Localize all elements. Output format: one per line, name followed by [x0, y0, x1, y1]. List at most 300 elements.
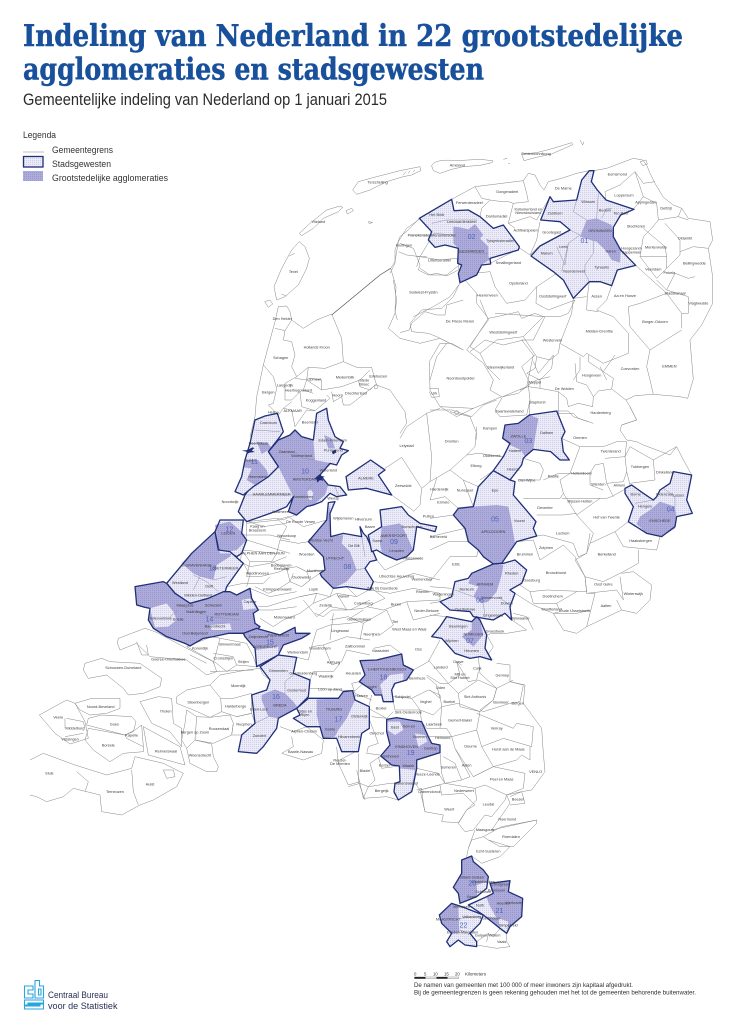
municipality labels: Vlieland	[312, 220, 325, 224]
region: stadsgewest 05 Apeldoorn: 05	[491, 517, 499, 524]
municipality labels: Alphen-Chaam	[291, 730, 317, 734]
municipality labels: Barendrecht	[205, 624, 226, 628]
municipality labels: Ooststellingwerf	[539, 295, 567, 299]
title	[23, 18, 683, 86]
municipality labels: Lingewaal	[331, 629, 349, 633]
municipality labels: Sint Anthonis	[464, 695, 486, 699]
municipality labels: Capelle	[244, 600, 256, 604]
municipality labels: Aalsmeer	[272, 510, 289, 514]
municipality labels: Hulst	[146, 783, 155, 787]
municipality labels: Assen	[591, 295, 602, 299]
municipality labels: Goes	[110, 723, 119, 727]
municipality labels: Weert	[444, 808, 455, 812]
municipality labels: Onderbanken	[472, 880, 495, 884]
municipality labels: Hilvarenbeek	[338, 735, 360, 739]
municipality labels: Valkenburg	[462, 915, 481, 919]
municipality labels: ARNHEM	[477, 582, 493, 586]
municipality labels: Nieuwkoop	[277, 534, 296, 538]
municipality labels: Gulpen-Wittem	[475, 933, 500, 937]
region: stadsgewest 08 Utrecht: 08	[343, 564, 351, 571]
municipality labels: Papendrecht	[267, 633, 290, 637]
municipality labels: Nieuwkruisland	[515, 211, 541, 215]
municipality labels: EDE	[452, 562, 460, 566]
municipality labels: Gemert-Bakel	[448, 718, 472, 722]
municipality labels: GRONINGEN	[588, 229, 612, 233]
municipality labels: Stadskanaal	[664, 291, 686, 295]
municipality labels: Geertruidenberg	[289, 672, 317, 676]
municipality labels: Steenwijkerland	[487, 366, 514, 370]
municipality labels: Veldhoven	[381, 754, 399, 758]
municipality labels: Veenendaal	[412, 578, 432, 582]
municipality labels: Boxmeer	[493, 700, 509, 704]
municipality labels: LEIDEN	[221, 532, 235, 536]
municipality labels: Zuidhorn	[547, 211, 563, 215]
region: stadsgewest 07 Nijmegen	[432, 617, 492, 660]
municipality labels: Waddinxveen	[246, 572, 269, 576]
municipality labels: Opsterland	[509, 282, 528, 286]
municipality labels: Heusden	[346, 672, 361, 676]
logo text: voor de Statistiek	[48, 1001, 118, 1012]
municipality labels: Vianen	[337, 594, 349, 598]
region: stadsgewest 02 Leeuwarden	[419, 199, 519, 283]
municipality labels: Marum	[541, 252, 553, 256]
municipality labels: Brielle	[173, 618, 184, 622]
municipality labels: Woerden	[299, 552, 314, 556]
municipality labels: Bergen	[511, 702, 524, 706]
municipality labels: Beesel	[512, 798, 524, 802]
municipality labels: Harderwijk	[430, 487, 448, 491]
municipality labels: De Wolden	[555, 387, 574, 391]
municipality labels: Bergeijk	[375, 789, 389, 793]
municipality labels: Twenterand	[601, 449, 621, 453]
title: agglomeraties en stadsgewesten	[23, 52, 484, 86]
municipality labels: AMERSFOORT	[381, 534, 408, 538]
municipality labels: Barneveld	[430, 535, 447, 539]
municipality labels: Simpelveld	[499, 923, 518, 927]
footnote: De namen van gemeenten met 100 000 of meer inwoners zijn kapitaal afgedrukt.	[414, 982, 633, 989]
municipality labels: Roermond	[498, 818, 516, 822]
municipality labels: Urk	[431, 392, 437, 396]
region: stadsgewest 15 Dordrecht	[243, 627, 310, 667]
region: stadsgewest 19 Eindhoven: 19	[407, 750, 415, 757]
municipality labels: Schinnen	[475, 890, 491, 894]
municipality labels: Veghel	[420, 700, 432, 704]
municipality labels: Helmond	[435, 736, 450, 740]
municipality labels: ROTTERDAM	[215, 613, 239, 617]
municipality labels: Rijnwaarde	[510, 617, 530, 621]
municipality labels: Hengelo	[638, 504, 652, 508]
municipality labels: Vaals	[497, 940, 506, 944]
municipality labels: Vught	[367, 685, 378, 689]
municipality labels: Lingewaard	[483, 613, 503, 617]
municipality labels: Roosendaal	[209, 727, 229, 731]
municipality labels: Vlissingen	[61, 738, 79, 742]
municipality labels: Meerssen	[453, 905, 470, 909]
municipality labels: AMSTERDAM	[293, 478, 317, 482]
municipality labels: Eijsden-Margraten	[447, 930, 478, 934]
region: stadsgewest 22 Maastricht: 22	[459, 922, 467, 929]
municipality labels: Midden-Drenthe	[586, 330, 613, 334]
municipality labels: Wormerland	[291, 454, 312, 458]
municipality labels: Winterswijk	[624, 592, 643, 596]
municipality labels: Moerdijk	[231, 684, 246, 688]
municipality labels: Roerdalen	[502, 835, 520, 839]
municipality labels: Zeewolde	[395, 484, 412, 488]
municipality labels: Zwijndrecht	[249, 635, 269, 639]
municipality labels: Delfzijl	[660, 207, 672, 211]
municipality labels: Heerenveen	[477, 294, 498, 298]
municipality labels: Tytsjerksteradiel	[486, 239, 514, 243]
municipality labels: Someren	[441, 765, 456, 769]
municipality labels: Valkenswaard	[394, 782, 418, 786]
municipality labels: Etten-Leur	[250, 708, 269, 712]
municipality labels: Hellendoorn	[571, 472, 592, 476]
municipality labels: Oost Gelre	[594, 583, 613, 587]
municipality labels: Westerveld	[543, 338, 562, 342]
municipality labels: Nederweert	[454, 789, 475, 793]
region: stadsgewest 11 Haarlem: 11	[251, 459, 258, 466]
municipality labels: Aalten	[601, 604, 611, 608]
municipality labels: Deurne	[464, 744, 477, 748]
municipality labels: Castricum	[260, 421, 277, 425]
scale bar: 15	[444, 972, 449, 976]
municipality labels: Reeuwijk	[274, 567, 290, 571]
municipality labels: Wijk bij Duurstede	[367, 587, 398, 591]
municipality labels: De Ronde Venen	[286, 520, 315, 524]
municipality labels: Rheden	[505, 572, 518, 576]
municipality labels: Reusel-	[333, 758, 347, 762]
municipality labels: Bladel	[360, 769, 370, 773]
municipality labels: Oss	[415, 648, 422, 652]
municipality labels: Utrechtse Heuvelrug	[379, 574, 414, 578]
region: stadsgewest 20 Sittard-Geleen: 20	[468, 881, 476, 888]
municipality labels: Lelystad	[400, 444, 414, 448]
municipality labels: Zaanstad	[279, 450, 295, 454]
municipality labels: Almelo	[613, 484, 625, 488]
municipality labels: Deventer	[537, 506, 553, 510]
municipality labels: Borger-Odoorn	[642, 320, 668, 324]
region: stadsgewest 02 Leeuwarden: 02	[468, 234, 476, 241]
municipality labels: Hoogeveen	[582, 373, 601, 377]
municipality labels: Heerde	[507, 467, 520, 471]
municipality labels: Menameradiel	[431, 233, 456, 237]
municipality labels: Stede	[359, 378, 369, 382]
municipality labels: Velsen	[244, 458, 256, 462]
municipality labels: Leek	[559, 245, 568, 249]
municipality labels: Oldambt	[678, 237, 693, 241]
municipality labels: Hoorn	[332, 393, 343, 397]
municipality labels: Gilze en	[298, 709, 312, 713]
municipality labels: Geldermalsen	[347, 618, 371, 622]
municipality labels: Steenbergen	[187, 700, 209, 704]
municipality labels: Maasgouw	[476, 828, 494, 832]
municipality labels: Werkendam	[287, 650, 308, 654]
municipality labels: Oisterwijk	[351, 714, 368, 718]
municipality labels: Wijchen	[445, 639, 458, 643]
municipality labels: Bergen op Zoom	[181, 730, 209, 734]
municipality labels: Baarn	[365, 525, 375, 529]
municipality labels: Zaltbommel	[345, 644, 365, 648]
municipality labels: Bodegraven-	[271, 563, 293, 567]
region: stadsgewest 06 Arnhem	[440, 560, 527, 620]
municipality labels: Oud-Beijerland	[182, 632, 208, 636]
municipality labels: ENSCHEDE	[649, 519, 671, 523]
municipality labels: Drechterland	[345, 392, 367, 396]
municipality labels: Sint-Oedenrode	[395, 711, 422, 715]
region: stadsgewest 03 Zwolle: 03	[524, 438, 532, 445]
municipality labels: Smallingerland	[496, 261, 521, 265]
municipality labels: TILBURG	[326, 708, 342, 712]
municipality labels: Zederik	[319, 603, 332, 607]
region: stadsgewest 19 Eindhoven	[381, 718, 440, 800]
municipality labels: Pekela	[663, 271, 676, 275]
region: stadsgewest 13 Den Haag: 13	[209, 566, 217, 573]
municipality labels: Hollands Kroon	[304, 345, 330, 349]
municipality labels: Koggenland	[306, 398, 326, 402]
municipality labels: Hilversum	[355, 518, 372, 522]
municipality labels: Noord-Beveland	[87, 705, 115, 709]
municipality labels: Asten	[462, 763, 472, 767]
municipality labels: Purmerend	[324, 449, 343, 453]
municipality labels	[45, 152, 708, 944]
municipality labels: Ommen	[573, 436, 587, 440]
municipality labels: Bunschoten	[402, 525, 422, 529]
municipality labels: Braassem	[249, 528, 266, 532]
municipality labels: Heiloo	[268, 411, 279, 415]
municipality labels: Kapelle	[125, 734, 138, 738]
municipality labels: Staphorst	[529, 400, 546, 404]
municipality labels: Borne	[631, 492, 641, 496]
region: stadsgewest 13 Den Haag	[167, 532, 243, 603]
municipality labels: Montfoort	[307, 569, 324, 573]
municipality labels: Leeuwarderadeel	[447, 220, 477, 224]
map: municipal boundaries	[30, 140, 713, 948]
municipality labels: Putten	[423, 514, 434, 518]
municipality labels: Gennep	[496, 673, 509, 677]
municipality labels: ALMERE	[358, 477, 374, 481]
municipality labels: De Mierden	[330, 762, 350, 766]
municipality labels: Oldebroek	[483, 454, 501, 458]
region: stadsgewest 01 Groningen	[531, 171, 636, 298]
municipality labels: Berkelland	[598, 552, 616, 556]
municipality labels: Achtkarspelen	[514, 229, 538, 233]
municipality labels: Littenseradiel	[428, 259, 451, 263]
municipality labels: Leudal	[483, 803, 494, 807]
municipality labels: Enkhuizen	[369, 375, 387, 379]
municipality labels: Heemstede	[249, 475, 268, 479]
municipality labels: Eersel	[379, 763, 390, 767]
municipality labels: Medemblik	[336, 375, 354, 379]
municipality labels: Aa en Hunze	[614, 294, 636, 298]
region: stadsgewest 01 Groningen: 01	[580, 238, 588, 245]
municipality labels: Franekeradeel	[408, 234, 432, 238]
municipality labels: Rijen	[301, 713, 309, 717]
municipality labels: Menterwolde	[645, 246, 667, 250]
municipality labels: West Maas en Waal	[392, 628, 426, 632]
municipality labels: ZWOLLE	[510, 434, 527, 438]
municipality labels: Harlingen	[396, 244, 412, 248]
municipality labels: Vlaardingen	[186, 610, 206, 614]
municipality labels: Woensdrecht	[189, 754, 212, 758]
municipality labels: Boekel	[443, 700, 455, 704]
municipality labels: Uden	[436, 686, 445, 690]
municipality labels: EINDHOVEN	[395, 745, 418, 749]
municipality labels: Venray	[491, 727, 503, 731]
municipality labels: Ermelo	[437, 501, 449, 505]
municipality labels: ZOETERMEER	[212, 567, 239, 571]
municipality labels: Waalwijk	[319, 674, 334, 678]
municipality labels: Losser	[673, 493, 685, 497]
municipality labels: Midden-Delfland	[184, 593, 212, 597]
municipality labels: Beemster	[302, 420, 319, 424]
municipality labels: Heeze-Leende	[415, 773, 440, 777]
region: stadsgewest 09 Amersfoort: 09	[390, 539, 398, 546]
municipality labels: Weesp	[327, 497, 339, 501]
scale bar	[414, 972, 486, 979]
municipality labels: Eemsmond	[608, 173, 627, 177]
municipality labels: Texel	[289, 270, 298, 274]
municipality labels: Lochem	[556, 531, 569, 535]
municipality labels: De Friese Meren	[446, 319, 474, 323]
region: stadsgewest 18 's-Hertogenbosch	[359, 654, 413, 702]
municipality labels: Terneuzen	[106, 790, 124, 794]
municipality labels: Groesbeek	[486, 629, 504, 633]
municipality labels: Schijndel	[395, 695, 411, 699]
municipality labels: Hardenberg	[591, 411, 611, 415]
region: stadsgewest 17 Tilburg: 17	[334, 717, 342, 724]
municipality labels: Rhenen	[416, 590, 429, 594]
municipality labels: Dronten	[445, 440, 458, 444]
municipality labels: Heemskerk	[249, 442, 268, 446]
municipality labels: Oosterhout	[287, 688, 307, 692]
municipality labels: Peel en Maas	[490, 777, 513, 781]
municipality labels: Best	[391, 726, 400, 730]
municipality labels: De Bilt	[348, 544, 361, 548]
municipality labels: Zwartewaterland	[495, 410, 523, 414]
municipality labels: Noordwijk	[222, 500, 238, 504]
municipality labels: Grave	[453, 660, 464, 664]
municipality labels: Montferland	[542, 608, 562, 612]
municipality labels: Dalfsen	[540, 431, 553, 435]
municipality labels: Oirschot	[370, 732, 385, 736]
municipality labels: Edam-Volendam	[319, 438, 347, 442]
legend: Stadsgewesten	[52, 159, 111, 169]
region: stadsgewest 14 Rotterdam	[135, 582, 260, 646]
municipality labels: Sint Hubert	[450, 676, 471, 680]
municipality labels: Laarbeek	[426, 722, 442, 726]
municipality labels: Drimmelen	[269, 669, 288, 673]
municipality labels: Overbetuwe	[455, 608, 475, 612]
municipality labels: Westervoort	[481, 596, 503, 600]
municipality labels: Rijssen-Holten	[568, 500, 592, 504]
municipality labels: Maassluis	[176, 604, 194, 608]
region: stadsgewest 06 Arnhem: 06	[476, 597, 484, 604]
municipality labels: LEEUWARDEN	[457, 249, 484, 253]
region: stadsgewest 08 Utrecht	[308, 502, 377, 590]
municipality labels: Reimerswaal	[155, 750, 177, 754]
municipality labels: Tholen	[160, 709, 172, 713]
municipality labels: Neder-Betuwe	[414, 609, 439, 613]
municipality labels: Stichtse Vecht	[309, 538, 334, 542]
municipality labels: Beek	[467, 895, 476, 899]
municipality labels: Grootegast	[542, 231, 562, 235]
municipality labels: Nunspeet	[457, 488, 474, 492]
municipality labels: Maasdriel	[372, 649, 389, 653]
municipality labels: Súdwest-Fryslân	[409, 291, 438, 295]
municipality labels: Molenwaard	[274, 616, 295, 620]
municipality labels: Cranendonck	[418, 790, 441, 794]
municipality labels: Nuenen	[413, 735, 427, 739]
municipality labels: Landgraaf	[491, 883, 510, 887]
municipality labels: Rucphen	[236, 722, 252, 726]
municipality labels: Korendijk	[192, 647, 208, 651]
municipality labels: ALKMAAR	[284, 409, 302, 413]
scale bar: 5	[424, 972, 427, 976]
municipality labels: Tubbergen	[631, 465, 649, 469]
municipality labels: Bellingwedde	[683, 262, 706, 266]
municipality labels: Beuningen	[449, 624, 467, 628]
municipality labels: Soest	[372, 539, 383, 543]
municipality labels: Kollumerland en	[514, 207, 542, 211]
municipality labels: HAARLEMMERMEER	[253, 493, 291, 497]
scale bar: 0	[414, 972, 417, 976]
municipality labels: Veere	[53, 715, 63, 719]
municipality labels: Langedijk	[277, 384, 293, 388]
municipality labels: Sluis	[45, 772, 54, 776]
region: stadsgewest 20 Sittard-Geleen	[453, 856, 488, 903]
municipality labels: Broec	[359, 383, 369, 387]
municipality labels: Aalburg	[327, 661, 340, 665]
legend	[23, 130, 168, 183]
municipality labels: Culemborg	[354, 602, 373, 606]
municipality labels: Halderberge	[225, 704, 246, 708]
municipality labels: Tynaarlo	[594, 266, 609, 270]
municipality labels: Bedum	[599, 208, 611, 212]
municipality labels: Voerendaal	[480, 917, 500, 921]
municipality labels: Loppersum	[614, 194, 634, 198]
municipality labels: Brunssum	[488, 888, 505, 892]
municipality labels: Amstelveen	[293, 495, 313, 499]
subtitle: Gemeentelijke indeling van Nederland op 1 januari 2015	[23, 90, 387, 109]
municipality labels: MAASTRICHT	[436, 918, 461, 922]
municipality labels: Noordenveld	[563, 269, 585, 273]
region: stadsgewest 03 Zwolle	[493, 411, 569, 480]
municipality labels: Renkum	[460, 587, 474, 591]
municipality labels: Kerkrade	[506, 901, 522, 905]
municipality labels: Woudrichem	[309, 647, 331, 651]
municipality labels: EMMEN	[662, 364, 677, 368]
municipality labels: Cromstrijen	[214, 657, 233, 661]
municipality labels: Wageningen	[433, 593, 454, 597]
municipality labels: Dantumadiel	[486, 215, 508, 219]
region: stadsgewest 12 Leiden: 12	[225, 527, 233, 534]
municipality labels: Appingedam	[635, 200, 657, 204]
municipality labels: Nuth	[476, 903, 484, 907]
region: stadsgewest 21 Heerlen	[468, 881, 523, 933]
municipality labels: Westland	[172, 581, 188, 585]
municipality labels: Geldrop	[424, 747, 437, 751]
municipality labels: Horst aan de Maas	[492, 747, 525, 751]
municipality labels: Loon op Zand	[318, 688, 342, 692]
municipality labels: Bronckhorst	[546, 571, 567, 575]
municipality labels: DORDRECHT	[253, 645, 278, 649]
municipality labels: Winsum	[581, 200, 595, 204]
municipality labels: APELDOORN	[481, 530, 506, 534]
municipality labels: Sappemeer	[622, 250, 642, 254]
legend: Legenda	[23, 130, 56, 140]
municipality labels: Ten Boer	[613, 212, 629, 216]
municipality labels: Dongeradeel	[496, 190, 518, 194]
